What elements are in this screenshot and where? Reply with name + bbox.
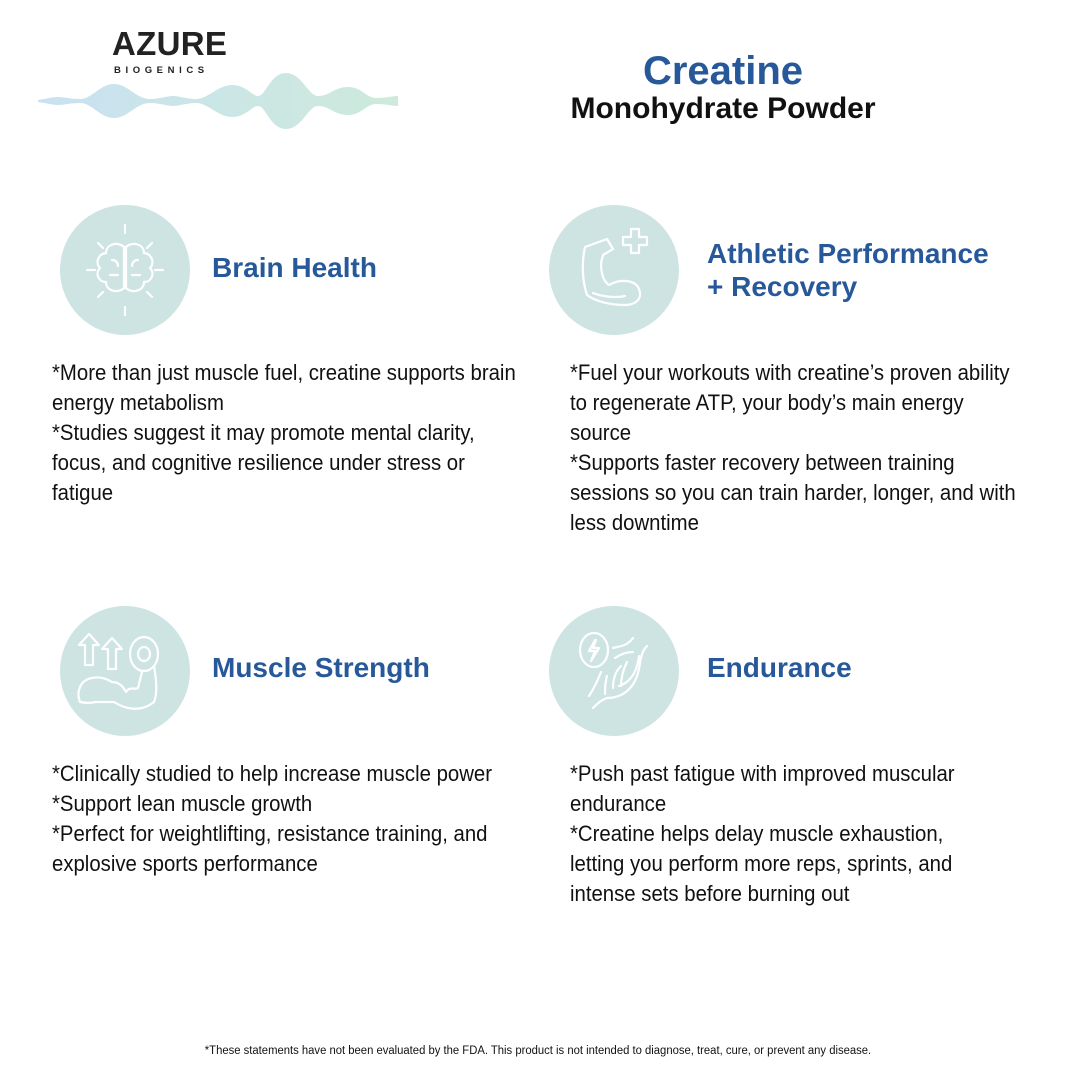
text: athletic performance: *Supports faster recovery between training sessions so you can train harder, longer, and with less downtime — [570, 450, 1016, 535]
text: brain health — [52, 360, 516, 505]
text: endurance: *Creatine helps delay muscle exhaustion, letting you perform more reps, sprints, and intense sets before burning out — [570, 821, 952, 906]
text: endurance — [570, 761, 955, 906]
text: muscle strength: *Support lean muscle growth — [52, 791, 312, 816]
icon: flexed arm — [549, 205, 679, 335]
panel: muscle strength — [52, 606, 492, 876]
text: athletic performance — [570, 360, 1016, 535]
logo wave — [38, 73, 398, 129]
title: Creatine — [643, 49, 803, 93]
text: brain health: *Studies suggest it may promote mental clarity, focus, and cognitive resilience under stress or fatigue — [52, 420, 475, 505]
icon: muscle strength — [60, 606, 190, 736]
footer disclaimer: *These statements have not been evaluated by the FDA. This product is not intended to diagnose, treat, cure, or prevent any disease. — [205, 1045, 871, 1057]
text: muscle strength — [52, 761, 492, 876]
heading: brain health: Brain Health — [212, 252, 377, 283]
heading: athletic performance — [707, 238, 989, 302]
heading: endurance: Endurance — [707, 652, 852, 683]
logo — [38, 25, 398, 129]
icon: endurance — [549, 606, 679, 736]
panel: endurance — [549, 606, 955, 906]
text: muscle strength: *Perfect for weightlifting, resistance training, and explosive sports performance — [52, 821, 488, 876]
text: brain health: *More than just muscle fuel, creatine supports brain energy metabolism — [52, 360, 516, 415]
heading: muscle strength: Muscle Strength — [212, 652, 430, 683]
text: endurance: *Push past fatigue with improved muscular endurance — [570, 761, 955, 816]
logo subtitle: BIOGENICS — [114, 65, 209, 76]
icon: brain — [60, 205, 190, 335]
heading: athletic performance: Athletic Performance — [707, 238, 989, 269]
logo wordmark: AZURE — [112, 25, 227, 62]
heading: athletic performance: + Recovery — [707, 271, 857, 302]
panel: athletic performance — [549, 205, 1016, 535]
text: muscle strength: *Clinically studied to help increase muscle power — [52, 761, 492, 786]
panel: brain health — [52, 205, 516, 505]
title: Monohydrate Powder — [570, 92, 876, 125]
text: athletic performance: *Fuel your workouts with creatine’s proven ability to regenerate ATP, your body’s main energy source — [570, 360, 1010, 445]
title — [570, 49, 876, 125]
